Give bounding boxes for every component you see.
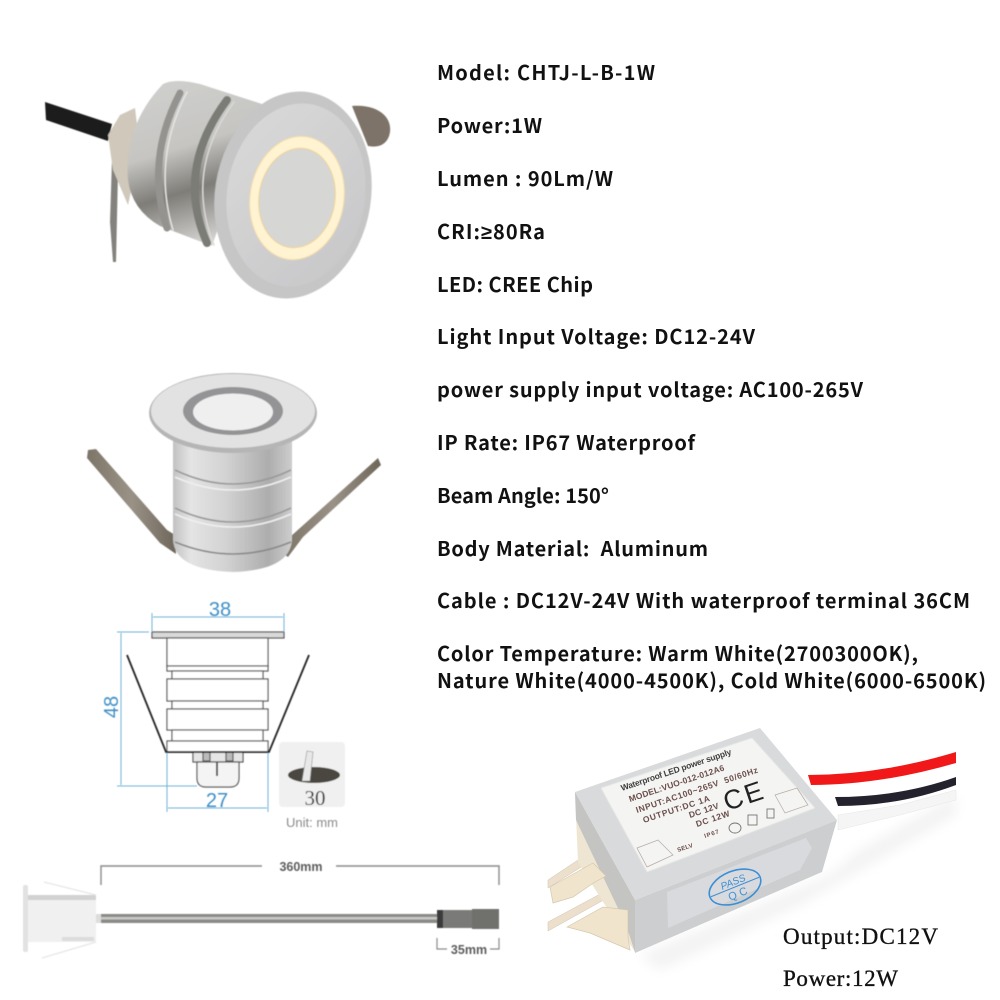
front face sticker xyxy=(667,838,812,928)
cylinder body xyxy=(173,440,292,572)
mounting clip right xyxy=(352,106,390,147)
PASS QC stamp: PASS xyxy=(719,873,748,893)
connector clips xyxy=(550,863,630,950)
lamp outline xyxy=(152,632,284,787)
35mm label: 35mm xyxy=(451,943,487,957)
black wire xyxy=(835,777,956,806)
spec: model: Model: CHTJ-L-B-1W xyxy=(437,57,655,86)
light silhouette xyxy=(23,882,102,958)
label line 2: MODEL:VUO-012-012A6 xyxy=(627,763,726,804)
IP67 mark: IP67 xyxy=(704,829,720,840)
glowing ring xyxy=(241,129,353,267)
safety icons xyxy=(729,809,774,833)
cable length diagram xyxy=(23,860,499,958)
output caption: Output:DC12V xyxy=(783,924,938,949)
input table xyxy=(637,840,673,867)
spec: colour temperature line 1: Color Temperature: Warm White(2700300OK), xyxy=(437,638,918,667)
cable xyxy=(45,102,112,141)
label sticker xyxy=(601,738,815,872)
spec: power supply input voltage: power supply input voltage: AC100-265V xyxy=(437,374,864,403)
left clip xyxy=(87,449,176,554)
power caption: Power:12W xyxy=(783,966,898,991)
cutout hole icon xyxy=(279,742,345,810)
ribs xyxy=(175,470,291,554)
printed label text xyxy=(619,747,808,867)
35mm bracket xyxy=(437,938,499,949)
top flange xyxy=(149,373,317,453)
spec: power: Power:1W xyxy=(437,110,542,139)
gland nut xyxy=(108,108,140,205)
cable highlight xyxy=(101,917,438,920)
spec: beam angle: Beam Angle: 150° xyxy=(437,480,609,509)
cutout hole icon: 30 xyxy=(304,786,326,810)
output table xyxy=(775,788,808,813)
dimension 38: 38 xyxy=(209,599,231,621)
spec: body material: Body Material: Aluminum xyxy=(437,533,708,562)
body grooves xyxy=(159,92,234,245)
connector xyxy=(437,909,499,929)
flange face xyxy=(151,374,315,448)
flange xyxy=(200,80,386,310)
flange face xyxy=(213,93,379,297)
front face xyxy=(635,820,837,953)
left end face with connectors xyxy=(575,792,635,952)
label line 1: Waterproof LED power supply xyxy=(619,747,733,793)
cable xyxy=(101,914,438,923)
spec: cable: Cable : DC12V-24V With waterproof terminal 36CM xyxy=(437,585,970,614)
360mm bracket xyxy=(101,866,499,885)
table shadow xyxy=(640,795,956,970)
spec: LED: LED: CREE Chip xyxy=(437,269,593,298)
SELV mark: SELV xyxy=(677,843,694,854)
PASS QC stamp: Q C xyxy=(727,885,749,904)
lamp body xyxy=(128,81,262,246)
PASS QC stamp xyxy=(704,862,766,912)
photo: power supply xyxy=(548,728,956,991)
blue dimension lines xyxy=(117,613,284,812)
white output wire xyxy=(838,790,956,830)
centre disc xyxy=(193,394,273,430)
360mm label: 360mm xyxy=(279,860,323,874)
grey ring xyxy=(183,387,283,435)
spec: light input voltage: Light Input Voltage: DC12-24V xyxy=(437,321,756,350)
label line 6: DC 12W xyxy=(694,808,732,829)
red wire xyxy=(808,752,956,785)
spec: colour temperature line 2: Nature White(4000-4500K), Cold White(6000-6500K) xyxy=(437,665,986,694)
photo: silver LED light front view xyxy=(87,373,381,572)
end face grey edge xyxy=(575,792,635,952)
white input wires xyxy=(548,850,618,931)
label line 5: DC 12V xyxy=(687,800,720,820)
spring wings xyxy=(127,655,309,752)
photo: angled LED light with glowing ring xyxy=(45,80,390,310)
spec: IP rate: IP Rate: IP67 Waterproof xyxy=(437,427,697,456)
dimension 48: 48 xyxy=(101,696,123,718)
CE mark: CE xyxy=(719,776,767,817)
unit label: Unit: mm xyxy=(286,815,338,830)
label line 4: OUTPUT:DC 1A xyxy=(641,793,711,825)
top face xyxy=(575,728,837,900)
ring centre xyxy=(252,143,342,253)
spec: CRI: CRI:≥80Ra xyxy=(437,216,545,245)
dimension 27: 27 xyxy=(206,790,228,812)
dimension drawing xyxy=(101,599,345,830)
label line 3: INPUT:AC100~265V 50/60Hz xyxy=(634,765,759,815)
specification list xyxy=(437,57,986,694)
right clip xyxy=(285,458,381,557)
mounting clip left xyxy=(110,160,118,262)
spec: lumen: Lumen : 90Lm/W xyxy=(437,163,613,192)
